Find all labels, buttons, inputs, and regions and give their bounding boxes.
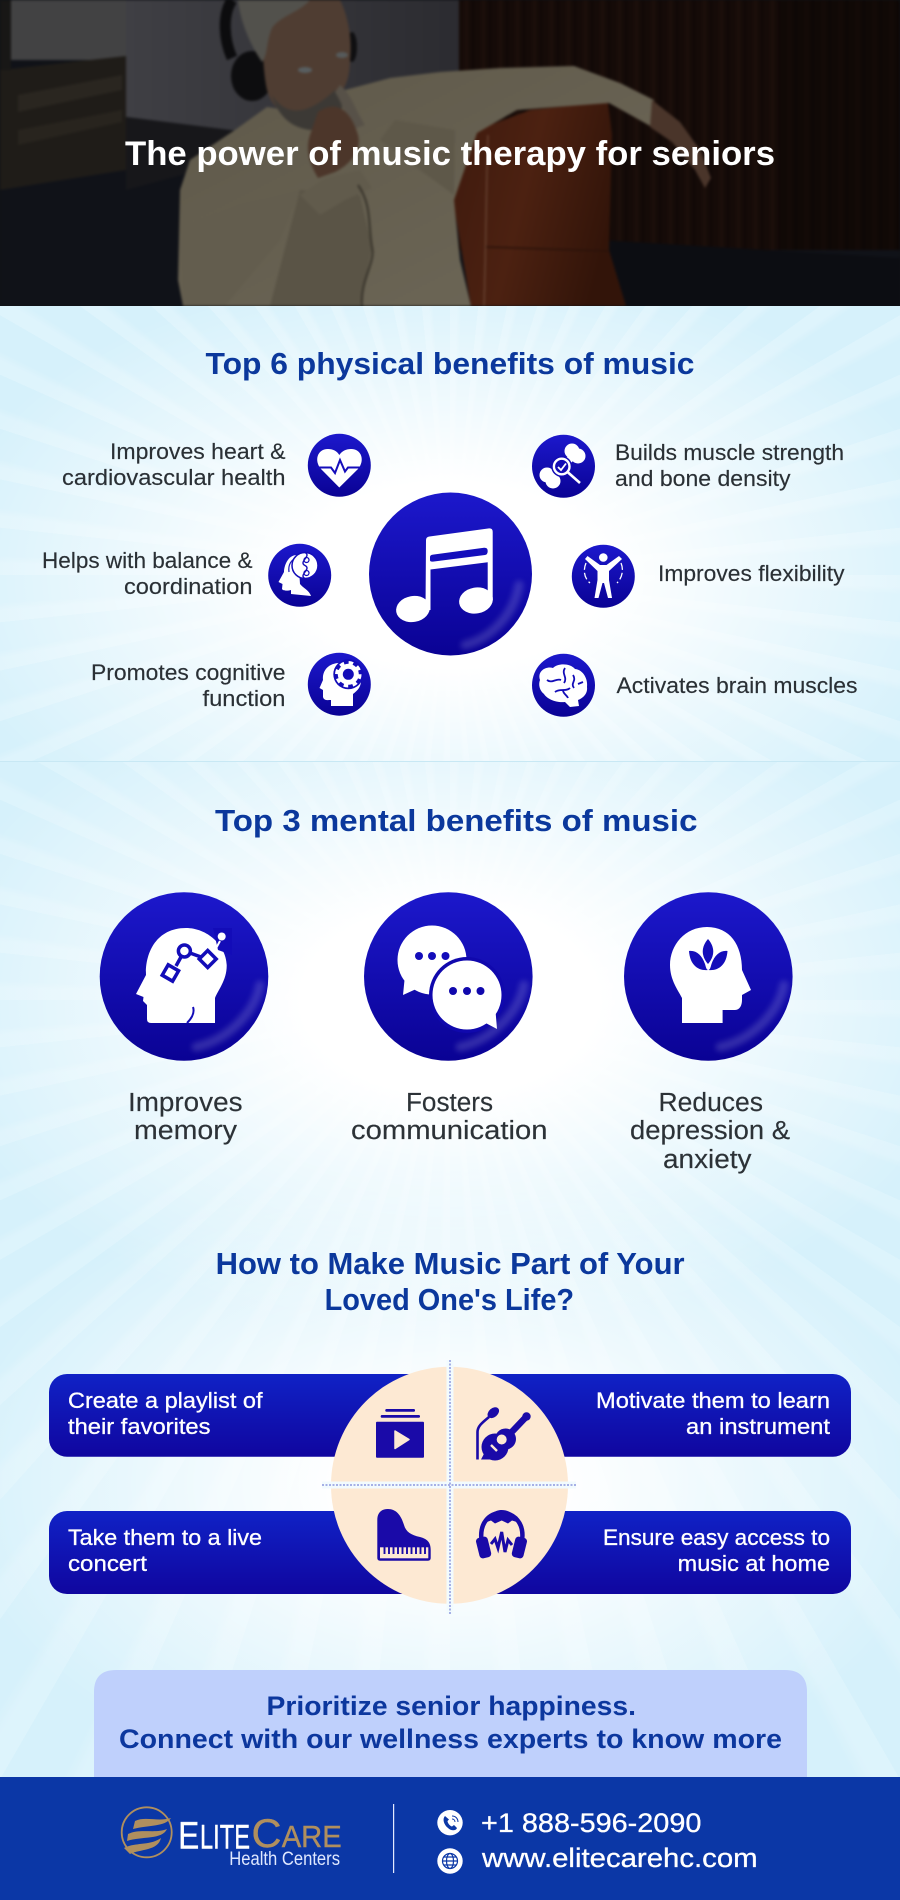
benefit: heart health: Improves heart & <box>110 439 286 464</box>
logo: Elite Care Health Centers: LITE <box>200 1818 250 1856</box>
label: improves memory: Improves <box>128 1089 242 1117</box>
footer <box>0 1777 900 1900</box>
benefit: balance and coordination: Helps with balance & <box>42 548 253 573</box>
benefit: heart health <box>62 434 371 497</box>
heading: how to make music part of life: How to Make Music Part of Your <box>216 1247 685 1281</box>
icon: headphones with waveform <box>475 1510 528 1559</box>
benefit: balance and coordination <box>42 544 331 607</box>
label: reduces depression and anxiety: Reduces <box>658 1089 763 1117</box>
benefit: brain muscles: Activates brain muscles <box>616 673 858 698</box>
benefit: reduces depression and anxiety <box>624 892 793 1061</box>
background: lower panel <box>0 762 900 1777</box>
contact: phone: +1 888-596-2090 <box>481 1808 701 1838</box>
icon: guitar and microphone <box>478 1405 531 1460</box>
heading: how to make music part of life <box>216 1247 685 1317</box>
logo: Elite Care Health Centers: Health Centers <box>229 1849 340 1870</box>
bar: access at home: music at home <box>678 1551 830 1576</box>
bar: instrument <box>461 1374 851 1457</box>
contact: website: www.elitecarehc.com <box>481 1843 758 1873</box>
label: fosters communication <box>351 1089 548 1145</box>
background: physical benefits panel <box>0 306 900 762</box>
bar: concert: Take them to a live <box>68 1525 262 1550</box>
label: improves memory: memory <box>134 1117 237 1145</box>
label: reduces depression and anxiety <box>630 1089 790 1174</box>
benefit: muscle and bone: Builds muscle strength <box>615 440 844 465</box>
bar: concert <box>49 1511 439 1594</box>
label: fosters communication: Fosters <box>406 1089 493 1117</box>
benefit: brain muscles <box>532 654 858 717</box>
heading: mental benefits: Top 3 mental benefits of music <box>215 804 698 838</box>
benefit: fosters communication <box>364 892 533 1061</box>
benefit: cognitive function: function <box>202 686 286 711</box>
benefit: flexibility: Improves flexibility <box>658 561 844 586</box>
callout: call to action <box>94 1670 807 1777</box>
benefit: balance and coordination: coordination <box>124 574 252 599</box>
logo: Elite Care Health Centers: E <box>178 1815 199 1857</box>
central peach circle <box>322 1360 576 1614</box>
benefit: muscle and bone: and bone density <box>615 466 790 491</box>
benefit: flexibility <box>572 545 844 608</box>
benefit: cognitive function: Promotes cognitive <box>91 660 286 685</box>
callout: call to action: Prioritize senior happiness. <box>266 1691 636 1721</box>
benefit: improves memory <box>100 892 268 1061</box>
heading: physical benefits: Top 6 physical benefits of music <box>206 347 695 381</box>
logo: Elite Care Health Centers: C <box>252 1812 282 1856</box>
logo: Elite Care Health Centers <box>122 1807 342 1870</box>
center music note badge <box>369 492 532 656</box>
bar: playlist: their favorites <box>68 1414 210 1439</box>
bar: instrument: an instrument <box>686 1414 830 1439</box>
bar: playlist <box>49 1374 439 1457</box>
label: reduces depression and anxiety: anxiety <box>663 1146 752 1174</box>
benefit: heart health: cardiovascular health <box>62 465 286 490</box>
panel: physical benefits diagram <box>42 434 858 717</box>
label: reduces depression and anxiety: depression & <box>630 1117 790 1145</box>
bar: concert: concert <box>68 1551 147 1576</box>
callout: call to action: Connect with our wellness experts to know more <box>119 1724 782 1754</box>
panel: mental benefits <box>100 892 793 1174</box>
benefit: muscle and bone <box>532 435 844 498</box>
icon: grand piano <box>377 1509 431 1561</box>
label: improves memory <box>128 1089 242 1145</box>
bar: playlist: Create a playlist of <box>68 1388 263 1413</box>
icon: playlist <box>376 1409 424 1458</box>
bar: access at home <box>461 1511 851 1594</box>
hero title: The power of music therapy for seniors <box>125 135 775 173</box>
panel: ways to add music <box>49 1360 851 1614</box>
heading: how to make music part of life: Loved One's Life? <box>325 1283 574 1317</box>
label: fosters communication: communication <box>351 1117 548 1145</box>
hero photo: senior man with headphones <box>0 0 900 306</box>
logo: Elite Care Health Centers: ARE <box>282 1819 342 1854</box>
benefit: cognitive function <box>91 653 371 716</box>
bar: access at home: Ensure easy access to <box>603 1525 830 1550</box>
bar: instrument: Motivate them to learn <box>596 1388 830 1413</box>
